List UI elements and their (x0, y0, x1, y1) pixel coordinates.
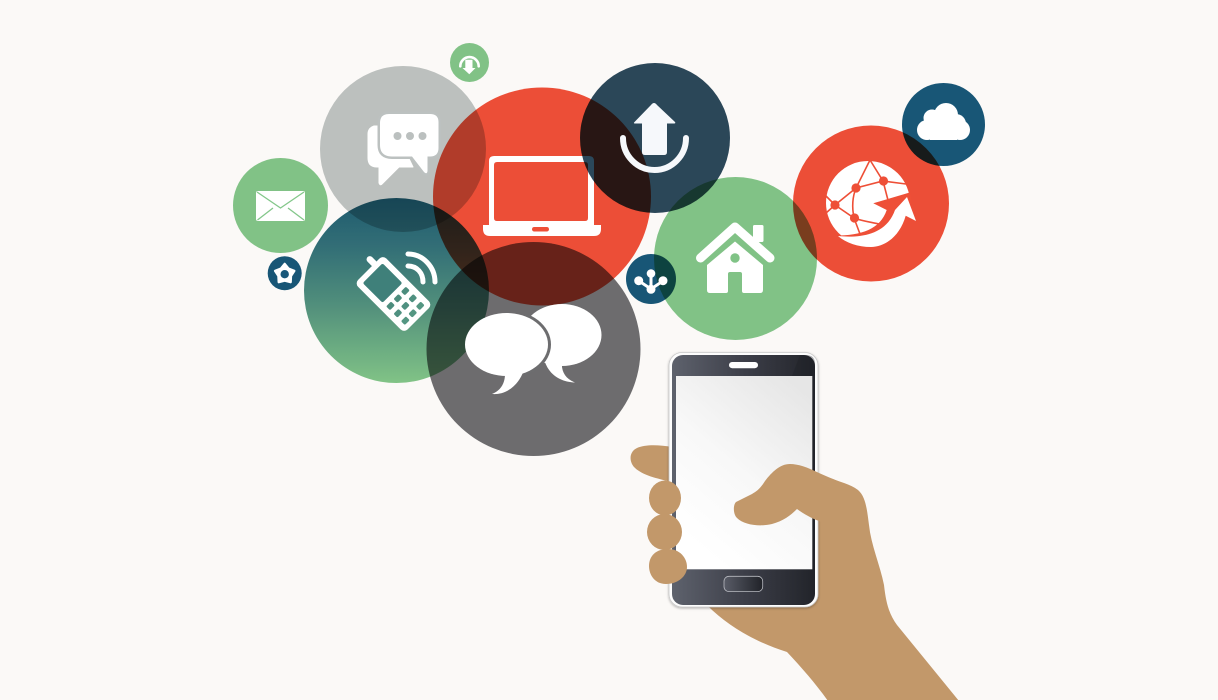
circle: dark gray speech (426, 242, 640, 456)
phone: home button (724, 576, 763, 592)
circle: gray chat (320, 66, 486, 232)
icon: upload arrow (623, 103, 686, 170)
circle: dark navy upload (580, 63, 730, 213)
circle: teal cloud (902, 83, 985, 166)
hand: index finger behind phone (631, 445, 672, 482)
phone: dark body (672, 355, 815, 605)
hand: thumb (734, 464, 845, 530)
circle: green home (654, 177, 817, 340)
phone: screen (676, 376, 812, 569)
icon: cloud (917, 103, 970, 140)
icon: chat bubbles (368, 114, 438, 185)
circle: navy star (268, 256, 302, 290)
phone: speaker (729, 362, 758, 368)
hand: finger two (647, 514, 682, 550)
icon: network nodes (634, 269, 668, 294)
icon: mobile phone with signal (348, 248, 435, 333)
hand: finger one (649, 480, 681, 516)
circle: green envelope (233, 158, 328, 253)
circle: red globe (793, 126, 949, 282)
hand: palm and wrist (702, 470, 959, 700)
circle: red laptop (433, 88, 651, 306)
icon: speech bubbles (462, 304, 602, 394)
phone: corner sheen (792, 355, 815, 376)
icon: house (700, 225, 770, 293)
icon: download arrow (460, 57, 479, 74)
circle: small teal network (626, 254, 676, 304)
hand and phone illustration (631, 352, 959, 700)
icon: globe with arrow (826, 161, 916, 247)
icon: laptop (483, 156, 601, 236)
icon: star (275, 264, 294, 282)
circle: teal gradient phone (304, 198, 489, 383)
circle: small green download (450, 43, 489, 82)
phone: white case (669, 352, 818, 607)
hand: finger three (649, 549, 687, 584)
icon: envelope (256, 191, 305, 221)
